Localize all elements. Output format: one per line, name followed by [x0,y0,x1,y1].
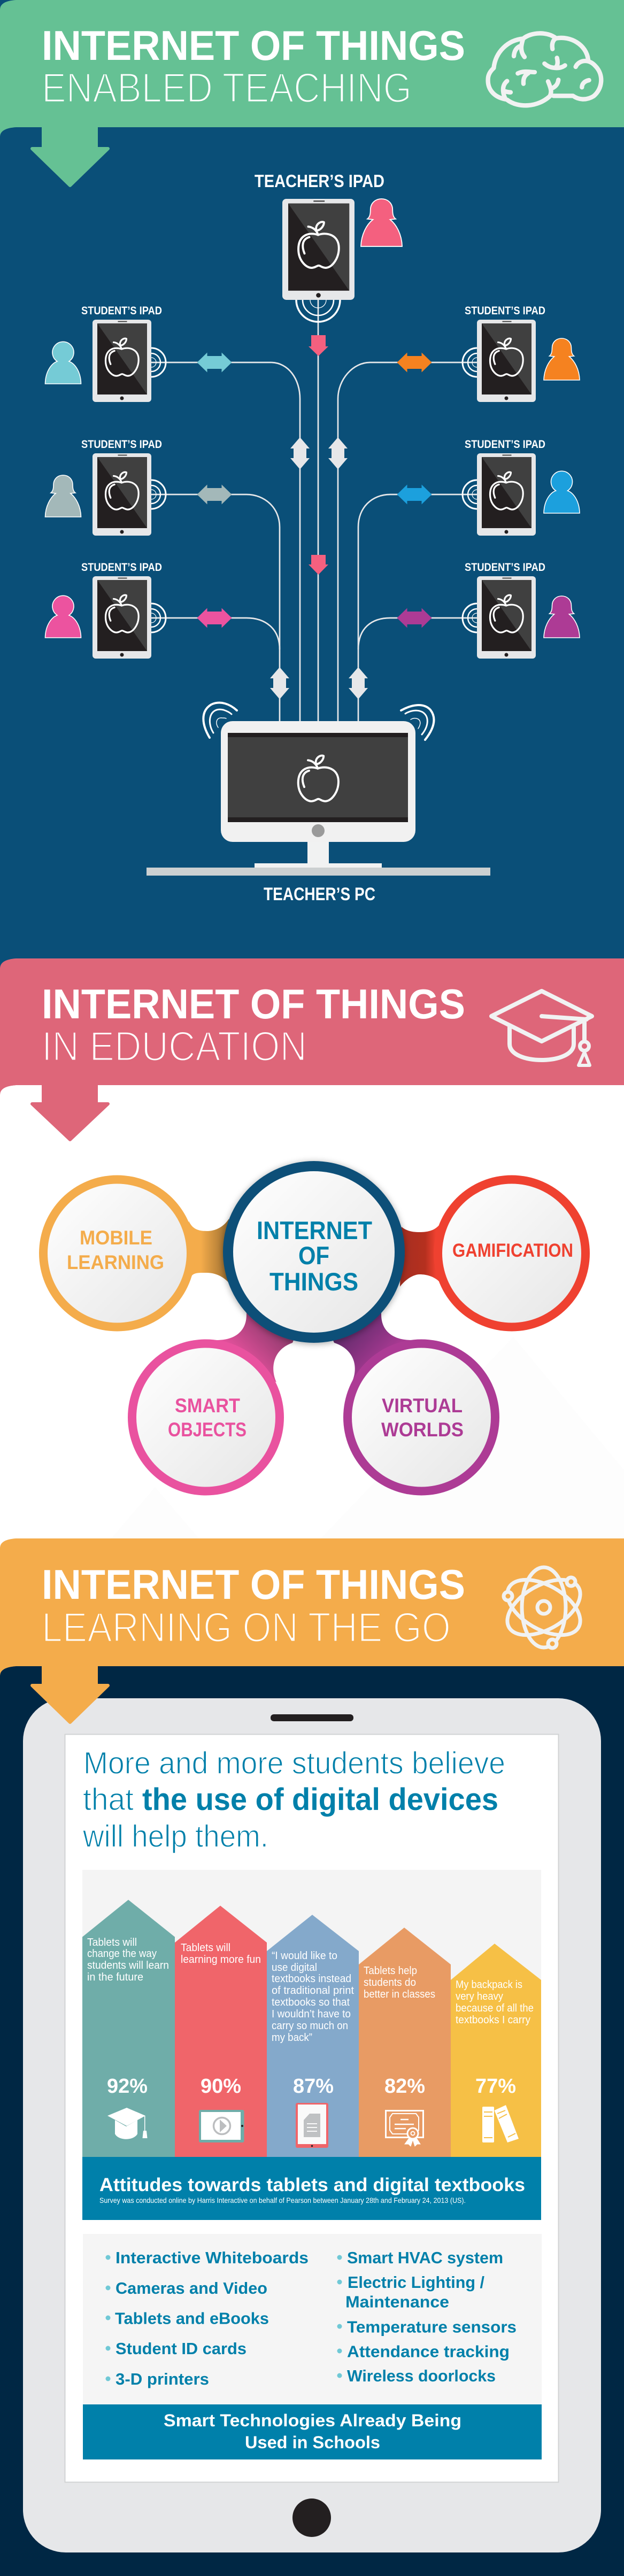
student row 2 right: STUDENT’S IPAD [465,438,545,451]
icon: graduation cap [491,991,592,1065]
band: smart technologies caption: Smart Technologies Already Being [164,2411,461,2430]
band: attitudes caption [82,2157,541,2220]
heading: internet of things enabled teaching [42,22,465,111]
bar: 87%: I wouldn’t have to [272,2008,351,2020]
bar: 77% [451,1944,541,2157]
connection lines [151,300,477,721]
label: teacher's pc: TEACHER’S PC [264,884,375,904]
student row 1 right [397,305,580,402]
circle: virtual worlds [343,1340,499,1496]
student row 2 right [397,438,580,536]
heading: internet of things learning on the go: LEARNING ON THE GO [42,1604,451,1651]
connector: gamification [400,1225,440,1287]
bar: 82% [359,1928,451,2157]
circle: virtual worlds: VIRTUAL [382,1395,463,1417]
list: right column: Smart HVAC system [347,2248,503,2267]
panel: learning on the go background [0,1657,624,2576]
bar: 92%: students will learn [87,1960,169,1971]
student row 2 left: STUDENT’S IPAD [81,438,162,451]
bar: 82%: students do [364,1977,416,1989]
heading: internet of things in education: INTERNET OF THINGS [42,980,465,1027]
student row 3 left: STUDENT’S IPAD [81,561,162,574]
arrow: orange section pointer [32,1664,108,1722]
arrow: green section pointer [32,124,108,185]
circle: smart objects: OBJECTS [168,1419,246,1441]
arrow: upper right double [328,437,348,469]
arrow: lower right double [349,667,368,699]
circle: virtual worlds: WORLDS [381,1419,464,1441]
bar: 82%: 82% [384,2075,425,2098]
list: right column: Attendance tracking [347,2342,510,2361]
arrow: pink section pointer [32,1082,108,1140]
white section body [0,1085,624,1550]
student row 1 left: STUDENT’S IPAD [81,305,162,317]
panel: in education [0,958,624,1550]
list: right column: Maintenance [345,2292,449,2311]
panel: learning on the go [0,1538,624,2576]
bar: 87%: textbooks instead [272,1973,351,1985]
list: right column: Electric Lighting / [348,2273,484,2292]
student row 2 left [45,438,232,536]
bar: 87%: carry so much on [272,2020,348,2032]
chart: attitudes bars [82,1900,541,2157]
icon: brain [488,33,601,105]
bar: 87%: 87% [293,2075,334,2098]
bar: 87% [267,1915,359,2157]
bar: 87%: “I would like to [272,1950,337,1962]
icon: video tablet [199,2110,244,2142]
list: left column [106,2248,309,2388]
bar: 77%: My backpack is [456,1979,522,1991]
bar: 82%: Tablets help [364,1965,417,1977]
arrow: upper left double [290,437,310,469]
list: left column: Cameras and Video [115,2279,267,2297]
bar: 90%: Tablets will [181,1942,230,1954]
heading: internet of things enabled teaching: INTERNET OF THINGS [42,22,465,69]
heading: digital devices statement: More and more students believe [83,1746,505,1781]
heading: internet of things in education [42,980,465,1070]
bar: 92% [82,1900,175,2157]
band: smart technologies caption: Used in Schools [245,2433,380,2452]
heading: digital devices statement: the use of digital devices [142,1782,498,1817]
bar: 87%: textbooks so that [272,1997,350,2008]
circle: internet of things [223,1161,405,1343]
device: teacher's ipad [282,199,355,322]
connector: smart objects [217,1304,299,1382]
circle: internet of things: THINGS [269,1267,358,1296]
icon: atom [498,1567,589,1648]
list: right column: Temperature sensors [347,2318,517,2336]
circle: internet of things: INTERNET [257,1216,372,1244]
bar: 82%: better in classes [364,1989,435,2000]
diagram: iot hub [39,1161,590,1496]
connector: mobile learning [189,1219,229,1283]
circle: mobile learning [39,1175,195,1331]
icon: books [482,2105,519,2142]
icon: monitor wifi waves [203,703,434,740]
student row 3 right [397,561,580,659]
header band: pink [0,958,624,1095]
heading: digital devices statement: that [83,1782,134,1817]
bar: 92%: in the future [87,1971,143,1983]
icon: solid grad cap [107,2108,148,2139]
student row 1 left [45,305,232,402]
icon: certificate [386,2110,423,2146]
circle: smart objects: SMART [175,1395,240,1417]
list: left column: Student ID cards [115,2339,246,2358]
tablet screen [65,1734,558,2482]
circle: gamification [434,1175,590,1331]
circle: smart objects [128,1340,284,1496]
list: right column: Wireless doorlocks [347,2366,496,2385]
icon: document tablet [296,2103,328,2148]
arrow: lower left double [270,667,289,699]
list: left column: Tablets and eBooks [115,2309,269,2327]
circle: mobile learning: LEARNING [67,1251,164,1273]
panel: smart technologies list [83,2234,542,2404]
bar: 90%: learning more fun [181,1954,261,1966]
device: teacher's pc [147,721,490,876]
bar: 92%: 92% [107,2075,148,2098]
heading: digital devices statement [82,1746,505,1854]
home button [292,2498,331,2537]
heading: internet of things enabled teaching: ENABLED TEACHING [42,64,412,111]
tablet frame [23,1698,601,2552]
connector: virtual worlds [326,1304,412,1382]
student row 3 right: STUDENT’S IPAD [465,561,545,574]
panel: chart background [82,1870,541,2159]
bar: 77%: textbooks I carry [456,2014,530,2026]
bar: 77%: very heavy [456,1991,503,2002]
circle: internet of things: OF [298,1241,329,1270]
bar: 77%: 77% [475,2075,516,2098]
bar: 77%: because of all the [456,2002,534,2014]
bar: 90% [175,1906,267,2157]
header band: orange [0,1538,624,1676]
bar: 87%: use digital [272,1962,317,1974]
list: left column: 3-D printers [115,2370,209,2388]
bar: 90%: 90% [201,2075,241,2098]
arrow: pink down lower [309,555,328,575]
navy section body [0,1666,624,2576]
person: teacher [361,199,402,246]
band: attitudes caption: Survey was conducted online by Harris Interactive on behalf of Pearson between January 28th and February 24, 2013 (US). [99,2196,466,2204]
band: smart technologies caption [83,2404,542,2459]
arrow: pink down upper [309,335,328,356]
student row 1 right: STUDENT’S IPAD [465,305,545,317]
speaker [271,1714,353,1721]
bar: 87%: of traditional print [272,1985,354,1997]
heading: internet of things learning on the go [42,1561,465,1651]
label: teacher's ipad: TEACHER’S IPAD [255,171,384,191]
panel: enabled teaching background [0,0,624,973]
band: attitudes caption: Attitudes towards tablets and digital textbooks [99,2175,525,2195]
list: right column [337,2248,517,2385]
student row 3 left [45,561,232,659]
list: left column: Interactive Whiteboards [115,2248,309,2267]
heading: digital devices statement: will help them. [82,1819,268,1854]
header band: green [0,0,624,137]
circle: gamification: GAMIFICATION [452,1240,573,1261]
bar: 92%: change the way [87,1948,157,1960]
heading: internet of things learning on the go: INTERNET OF THINGS [42,1561,465,1608]
bar: 92%: Tablets will [87,1937,137,1948]
bar: 87%: my back” [272,2032,312,2044]
faint background triangles [111,1337,624,1538]
circle: mobile learning: MOBILE [80,1227,152,1249]
heading: internet of things in education: IN EDUCATION [42,1023,307,1070]
panel: in education background [0,1085,624,1545]
panel: enabled teaching [0,0,624,904]
